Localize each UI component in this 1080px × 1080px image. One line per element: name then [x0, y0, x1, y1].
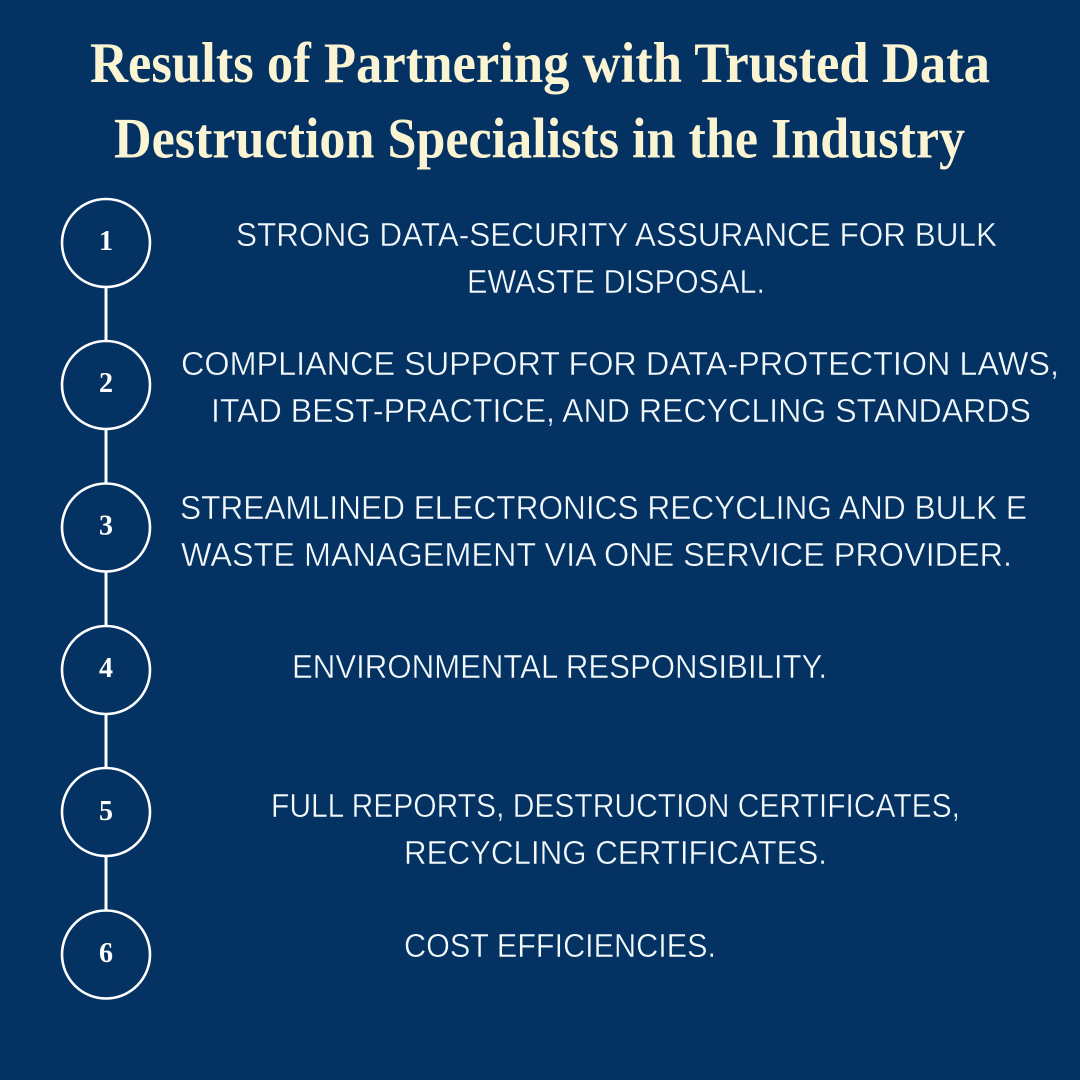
title: Destruction Specialists in the Industry: [114, 108, 965, 170]
step 2 text: ITAD BEST-PRACTICE, AND RECYCLING STANDARDS: [211, 392, 1031, 429]
step 4 marker: [62, 626, 150, 714]
step 1 text: [236, 216, 997, 300]
step 2 text: COMPLIANCE SUPPORT FOR DATA-PROTECTION LAWS,: [181, 345, 1059, 382]
step 2 marker: [62, 341, 150, 429]
step 1 marker: 1: [99, 226, 113, 257]
step 4 text: ENVIRONMENTAL RESPONSIBILITY.: [292, 648, 827, 685]
title: [90, 32, 990, 170]
step 3 marker: 3: [99, 510, 113, 542]
step 6 marker: 6: [99, 938, 113, 969]
step 1 text: EWASTE DISPOSAL.: [467, 263, 765, 300]
timeline connector: [104, 285, 108, 915]
title: Results of Partnering with Trusted Data: [90, 32, 990, 95]
step 5 marker: [62, 768, 150, 856]
step 2 marker: 2: [99, 368, 113, 399]
step 3 text: STREAMLINED ELECTRONICS RECYCLING AND BULK E: [180, 489, 1027, 526]
step 5 text: FULL REPORTS, DESTRUCTION CERTIFICATES,: [271, 787, 960, 824]
step 3 text: WASTE MANAGEMENT VIA ONE SERVICE PROVIDER.: [181, 536, 1012, 573]
step 5 marker: 5: [99, 796, 113, 827]
step 2 text: [181, 345, 1059, 429]
step 3 marker: [62, 484, 150, 572]
step 5 text: [271, 787, 960, 871]
step 4 marker: 4: [99, 653, 113, 684]
step 1 marker: [62, 199, 150, 287]
step 5 text: RECYCLING CERTIFICATES.: [404, 834, 827, 871]
step 1 text: STRONG DATA-SECURITY ASSURANCE FOR BULK: [236, 216, 997, 253]
step 6 text: COST EFFICIENCIES.: [404, 927, 716, 964]
step 6 marker: [62, 910, 150, 998]
step 3 text: [180, 489, 1027, 573]
